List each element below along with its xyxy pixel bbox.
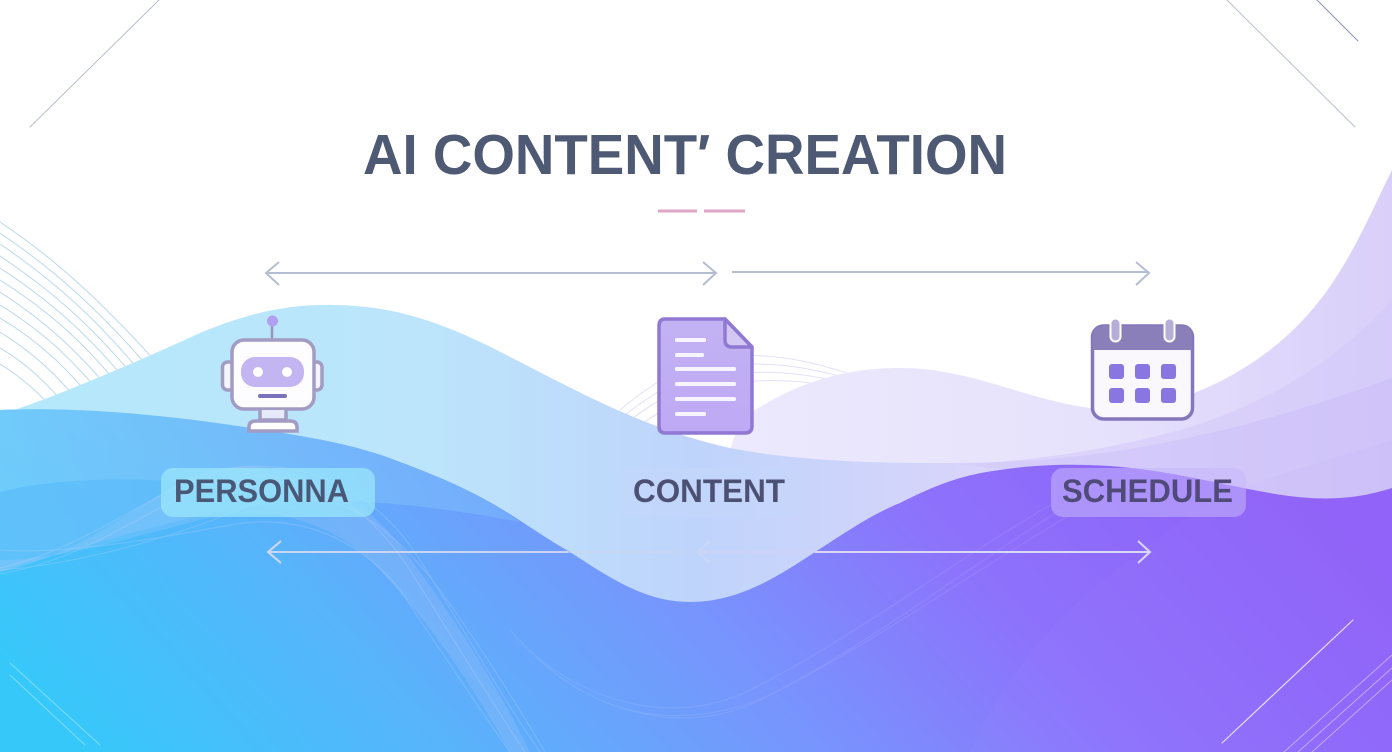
label: persona [161,468,375,517]
icon: calendar [1092,318,1192,419]
arrow: bottom left [268,541,680,563]
arrow: top left double-headed [266,262,716,285]
label: content: CONTENT [633,473,785,509]
label: persona: PERSONNA [174,473,349,509]
title accent dashes [658,210,745,212]
title: AI CONTENT′ CREATION [363,123,1007,187]
arrow: bottom right [698,541,1150,563]
arrow: top right [732,262,1149,285]
label: content [620,468,800,517]
decorative flow ribbons [0,440,1392,752]
label: schedule [1051,468,1246,517]
icon: robot [222,316,322,431]
label: schedule: SCHEDULE [1062,473,1233,509]
icon: document [659,319,752,433]
